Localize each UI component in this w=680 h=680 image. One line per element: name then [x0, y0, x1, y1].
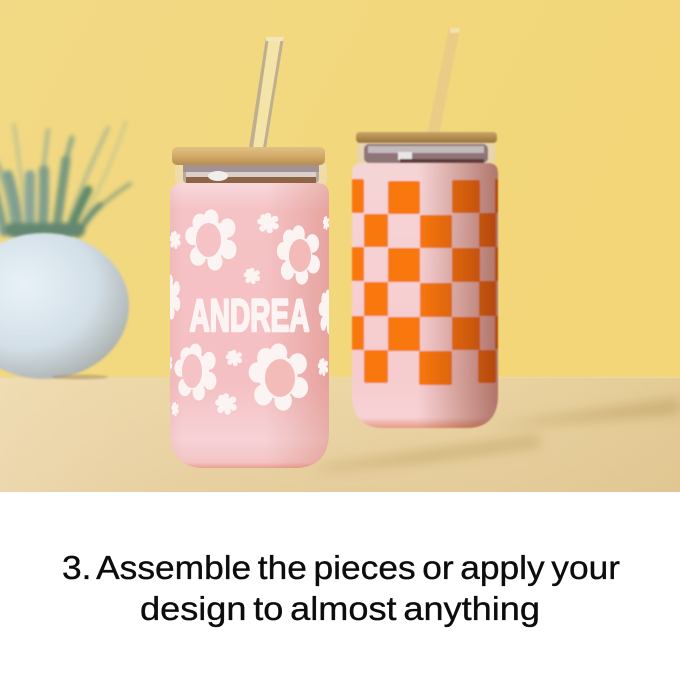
- large daisy top left: [185, 209, 236, 271]
- small daisies: [170, 212, 329, 416]
- back cup glass neck: [357, 142, 495, 166]
- back cup straw: [427, 28, 460, 135]
- back cup: orange checkerboard: [350, 28, 500, 428]
- caption heading: 3. Assemble the pieces or apply your: [62, 549, 620, 586]
- front cup bamboo lid: [172, 147, 325, 165]
- daisy pattern: [170, 209, 329, 416]
- front cup body: [170, 183, 329, 468]
- caption heading: design to almost anything: [140, 590, 540, 627]
- daisy top right: [277, 225, 320, 285]
- name on cup: ANDREA: [190, 290, 310, 341]
- front cup glass straw: [249, 37, 284, 148]
- front cup: daisies with name: [170, 37, 329, 468]
- white caption panel: [0, 492, 680, 680]
- front cup glass neck: [175, 162, 327, 186]
- background photo: [0, 0, 680, 492]
- back cup body: [350, 163, 500, 428]
- icon: blurred plant: [0, 122, 130, 235]
- icon: white round vase: [0, 233, 129, 380]
- back cup bamboo lid: [356, 132, 497, 143]
- checker pattern: [350, 179, 500, 385]
- table shadows: [312, 398, 680, 470]
- caption heading: [62, 549, 620, 627]
- large daisy bottom right: [249, 343, 308, 411]
- daisy bottom left: [174, 343, 216, 401]
